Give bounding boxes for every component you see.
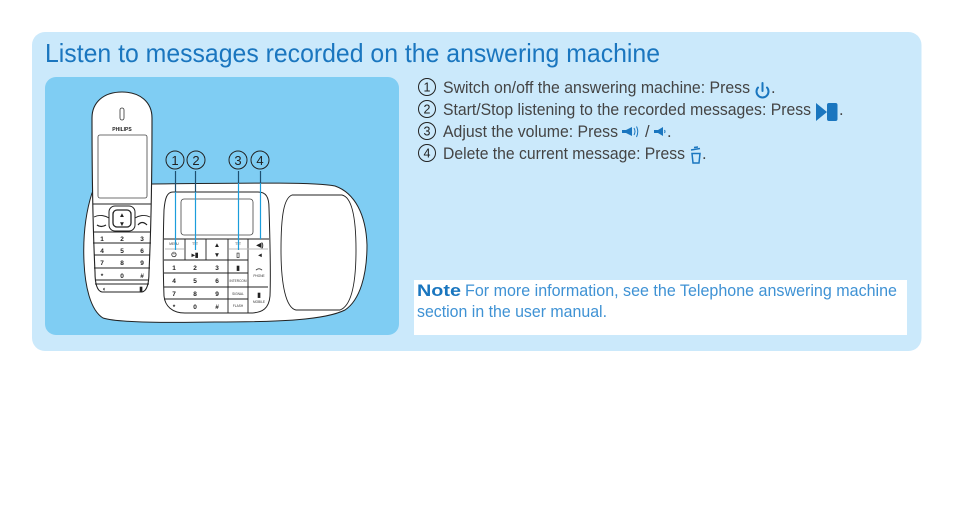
base keypad labels: TTT: [235, 242, 241, 246]
brand label: PHILIPS: [112, 127, 132, 133]
handset keypad: 7: [100, 260, 104, 267]
base keypad labels: [169, 242, 265, 311]
base keypad labels: 6: [215, 278, 219, 285]
step 2: .: [839, 101, 844, 119]
base keypad labels: ⌒: [255, 267, 263, 276]
base keypad panel: [163, 192, 270, 313]
base keypad labels: ▲: [214, 242, 220, 249]
base keypad labels: MENU: [169, 242, 179, 246]
step 4: Delete the current message: Press: [443, 145, 685, 163]
handset keypad: ▮: [139, 286, 143, 293]
handset keypad: #: [140, 273, 144, 280]
base keypad labels: #: [215, 304, 219, 311]
handset keypad: 4: [100, 248, 104, 255]
step 4: 4: [424, 146, 431, 160]
instruction steps: [418, 78, 844, 163]
base keypad labels: PHONE: [253, 274, 265, 278]
step 1: .: [771, 79, 776, 97]
panel: answering machine section: [32, 32, 922, 351]
base keypad labels: 3: [215, 265, 219, 272]
base keypad labels: ▸▮: [191, 252, 199, 259]
step 1: 1: [424, 80, 431, 94]
title: Listen to messages recorded on the answering machine: [45, 38, 660, 68]
callout numbers: [166, 151, 269, 169]
handset keypad: ◖: [102, 286, 106, 293]
base keypad labels: 2: [193, 265, 197, 272]
base keypad labels: FLASH: [233, 304, 244, 308]
icon: volume down: [654, 127, 665, 136]
icon: power: [756, 83, 768, 97]
handset screen: [98, 135, 147, 198]
base keypad labels: ⏻: [171, 251, 177, 259]
base keypad labels: 0: [193, 304, 197, 311]
handset keypad: 3: [140, 236, 144, 243]
step 4: .: [702, 145, 707, 163]
step 2: Start/Stop listening to the recorded messages: Press: [443, 101, 811, 119]
handset keypad: 5: [120, 248, 124, 255]
base keypad labels: 5: [193, 278, 197, 285]
speaker slot: [120, 108, 124, 120]
handset cradle: [281, 195, 356, 310]
handset keypad: 9: [140, 260, 144, 267]
callout lines: [176, 171, 260, 250]
base keypad labels: ▮: [236, 265, 240, 272]
handset keypad: 2: [120, 236, 124, 243]
base keypad labels: *: [173, 304, 176, 311]
illustration: handset: [92, 92, 152, 293]
base keypad labels: MOBILE: [253, 300, 265, 304]
base keypad labels: TTT: [192, 242, 198, 246]
illustration: base station: [84, 183, 367, 322]
step 2: 2: [424, 102, 431, 116]
handset keypad: [93, 232, 151, 293]
base keypad labels: 4: [172, 278, 176, 285]
panel: phone illustration: [45, 77, 399, 335]
step 3: /: [645, 123, 650, 141]
handset keypad: 8: [120, 260, 124, 267]
step 3: 3: [424, 124, 431, 138]
icon: delete: [691, 147, 700, 163]
icon: volume up: [622, 126, 638, 137]
base keypad labels: 7: [172, 291, 176, 298]
handset keypad: 6: [140, 248, 144, 255]
note label: Note: [417, 282, 461, 300]
note box: section in the user manual.: [417, 303, 607, 321]
base keypad labels: ▼: [214, 252, 220, 259]
base keypad labels: 9: [215, 291, 219, 298]
base keypad labels: INTERCOM: [230, 279, 247, 283]
handset keypad: *: [101, 273, 104, 280]
handset keypad: 0: [120, 273, 124, 280]
step 1: Switch on/off the answering machine: Press: [443, 79, 750, 97]
base keypad labels: ◂: [257, 252, 262, 259]
note text: For more information, see the Telephone answering machine: [465, 282, 897, 300]
step 3: Adjust the volume: Press: [443, 123, 618, 141]
navigation cluster: ▲: [119, 212, 125, 219]
base keypad labels: 8: [193, 291, 197, 298]
base keypad labels: ◀): [255, 242, 264, 249]
navigation cluster: [93, 204, 151, 231]
handset keypad: 1: [100, 236, 104, 243]
callout numbers: 1: [171, 153, 179, 168]
base keypad labels: ▯: [236, 252, 240, 259]
callout numbers: 2: [192, 153, 200, 168]
icon: play and stop: [816, 103, 838, 121]
navigation cluster: ▼: [119, 221, 125, 228]
base keypad labels: 1: [172, 265, 176, 272]
base display: [181, 199, 253, 235]
callout numbers: 3: [234, 153, 242, 168]
note box: [414, 280, 907, 335]
callout numbers: 4: [256, 153, 264, 168]
step 3: .: [667, 123, 672, 141]
base keypad labels: SIGNAL: [232, 292, 244, 296]
base keypad labels: ▮: [257, 292, 261, 299]
